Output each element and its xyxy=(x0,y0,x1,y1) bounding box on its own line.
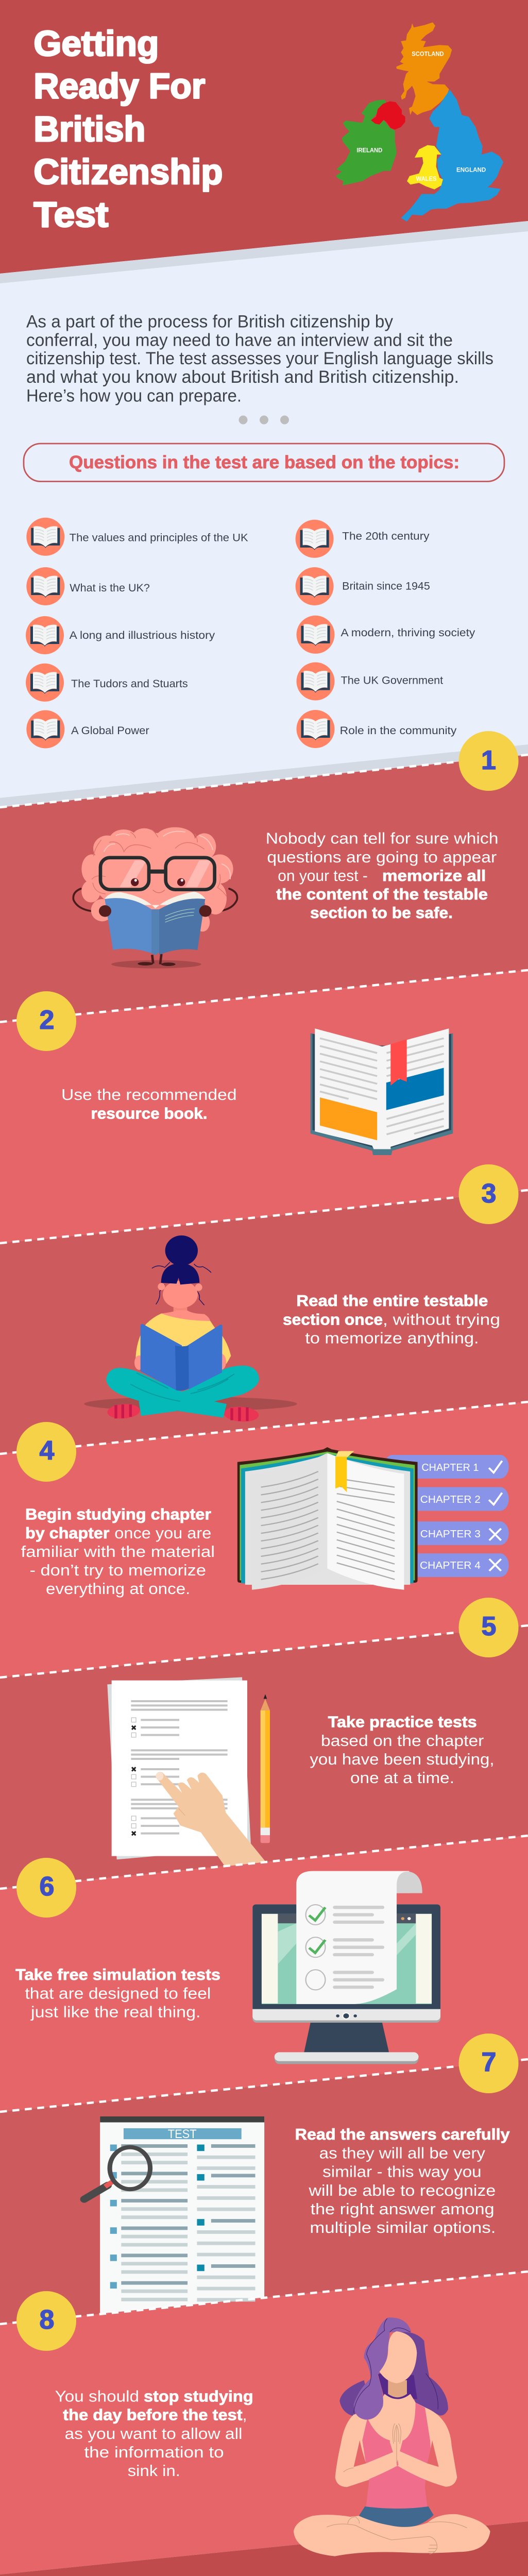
step 2 text: Use the recommended xyxy=(61,1086,237,1104)
step 3 text: section once xyxy=(283,1311,383,1328)
step 4 text xyxy=(21,1505,215,1598)
map of UK and Ireland xyxy=(336,22,503,222)
topic: since 1945 xyxy=(296,567,430,605)
step 4 text: - don’t try to memorize xyxy=(30,1561,206,1579)
topic list xyxy=(26,518,475,748)
step 1 text xyxy=(266,829,499,922)
title xyxy=(33,24,223,234)
step 8 text: , xyxy=(243,2406,247,2424)
intro text: and what you know about British and British citizenship. xyxy=(26,367,459,387)
step 6 text xyxy=(15,1965,220,2021)
step 1 panel xyxy=(73,827,498,969)
three dots xyxy=(239,415,289,425)
intro text: As a part of the process for British citizenship by xyxy=(26,312,393,331)
step 5 text: Take practice tests xyxy=(328,1713,477,1731)
number badge 6: 6 xyxy=(40,1872,54,1902)
number badge 3 xyxy=(458,1164,518,1224)
number badge 7: 7 xyxy=(482,2047,496,2077)
step 1 text: section to be safe. xyxy=(310,904,453,922)
topic: what is the UK: What is the UK? xyxy=(70,582,150,594)
step 7 text: will be able to recognize xyxy=(308,2181,496,2199)
dashed dividers xyxy=(0,755,528,2324)
illustration: monitor with checklist xyxy=(252,1871,440,2064)
number badge 4: 4 xyxy=(40,1436,55,1466)
step 5 text: you have been studying, xyxy=(310,1750,495,1768)
topic: Tudors xyxy=(26,664,188,702)
step 8 text: the information to xyxy=(84,2443,224,2461)
chapter tabs: CHAPTER 1 xyxy=(421,1462,479,1473)
step 3 text xyxy=(283,1292,500,1347)
title: Ready For xyxy=(33,66,205,106)
step 1 text: memorize all xyxy=(382,867,486,885)
topic: 20th century xyxy=(296,520,430,558)
step 5 text: based on the chapter xyxy=(321,1732,484,1750)
topic: Tudors: The Tudors and Stuarts xyxy=(71,678,188,690)
number badge 1 xyxy=(458,731,518,791)
illustration: brain reading xyxy=(73,827,237,969)
title: British xyxy=(33,109,145,149)
map of UK and Ireland: ENGLAND xyxy=(456,167,486,174)
topic: 20th century: The 20th century xyxy=(342,531,430,542)
topic: since 1945: Britain since 1945 xyxy=(342,580,430,592)
step 5 text xyxy=(310,1713,495,1787)
step 1 text: the content of the testable xyxy=(276,885,488,903)
step 4 panel xyxy=(21,1447,509,1598)
number badge 2: 2 xyxy=(40,1005,54,1035)
title: Citizenship xyxy=(33,152,223,192)
topic: history xyxy=(26,616,215,654)
step 8 text: as you want to allow all xyxy=(65,2425,242,2443)
step 2 text xyxy=(61,1086,237,1122)
topic: global power xyxy=(26,710,149,748)
chapter tabs: CHAPTER 3 xyxy=(420,1529,481,1540)
topic: modern society: A modern, thriving society xyxy=(341,627,475,639)
step 3 text: , without trying xyxy=(383,1311,500,1328)
step 7 text: Read the answers carefully xyxy=(295,2125,510,2143)
number badge 8: 8 xyxy=(40,2305,54,2335)
step 7 panel xyxy=(84,2116,510,2314)
topic: what is the UK xyxy=(26,567,150,605)
topic: modern society xyxy=(297,616,475,654)
illustration: test paper, hand and pencil xyxy=(107,1677,270,1867)
step 7 text: multiple similar options. xyxy=(310,2218,496,2236)
step 7 text: as they will all be very xyxy=(319,2144,486,2162)
number badge 3: 3 xyxy=(482,1179,496,1209)
intro text: conferral, you may need to have an interview and sit the xyxy=(26,331,453,350)
number badge 2 xyxy=(16,991,76,1051)
step 5 text: one at a time. xyxy=(350,1769,454,1787)
step 8 text: the day before the test xyxy=(63,2406,243,2424)
number badge 5 xyxy=(458,1598,518,1657)
topic: global power: A Global Power xyxy=(71,725,149,737)
step 2 panel xyxy=(61,1028,453,1155)
topic: community: Role in the community xyxy=(340,725,457,737)
map of UK and Ireland: WALES xyxy=(416,176,437,182)
topics heading box: Questions in the test are based on the topics: xyxy=(69,452,459,472)
step 8 panel xyxy=(55,2317,490,2556)
number badge 6 xyxy=(16,1858,76,1918)
topic: government xyxy=(297,663,443,701)
illustration: test sheet with magnifier xyxy=(84,2116,264,2314)
number badge 8 xyxy=(16,2291,76,2351)
chapter tabs xyxy=(384,1455,509,1577)
step 3 panel xyxy=(84,1235,500,1423)
topic: values: The values and principles of the UK xyxy=(70,532,248,544)
intro text: citizenship test. The test assesses your English language skills xyxy=(26,349,493,368)
illustration: woman reading xyxy=(84,1235,297,1423)
chapter tabs: CHAPTER 2 xyxy=(420,1494,481,1505)
step 8 text: sink in. xyxy=(128,2462,180,2480)
step 6 panel xyxy=(15,1871,440,2064)
topic: government: The UK Government xyxy=(341,675,443,687)
step 4 text: once you are xyxy=(114,1524,211,1542)
step 4 text: familiar with the material xyxy=(21,1543,215,1561)
intro text xyxy=(26,312,493,406)
topic: history: A long and illustrious history xyxy=(70,630,215,641)
illustration: open resource book xyxy=(311,1028,453,1155)
step 1 text: on your test - xyxy=(278,867,368,885)
topic: community xyxy=(297,710,457,748)
number badge 7 xyxy=(458,2033,518,2093)
step 6 text: that are designed to feel xyxy=(25,1985,211,2002)
step 6 text: just like the real thing. xyxy=(30,2003,201,2021)
title: Getting xyxy=(33,24,159,63)
step 5 panel xyxy=(107,1677,495,1867)
step 8 text: stop studying xyxy=(144,2387,253,2405)
step 8 text xyxy=(55,2387,253,2480)
chapter tabs: CHAPTER 4 xyxy=(420,1560,481,1571)
step 4 text: by chapter xyxy=(25,1524,109,1542)
step 1 text: questions are going to appear xyxy=(267,848,497,866)
step 8 text: You should xyxy=(55,2387,139,2405)
step 7 text: similar - this way you xyxy=(322,2163,482,2181)
illustration: meditating woman xyxy=(294,2317,490,2556)
step 2 text: resource book. xyxy=(91,1104,207,1122)
number badge 1: 1 xyxy=(481,745,496,775)
number badge 5: 5 xyxy=(482,1612,496,1641)
step 7 text xyxy=(295,2125,510,2236)
intro text: Here’s how you can prepare. xyxy=(26,386,242,406)
step 6 text: Take free simulation tests xyxy=(15,1965,220,1984)
step 1 text: Nobody can tell for sure which xyxy=(266,829,499,848)
title: Test xyxy=(33,195,108,234)
step 3 text: to memorize anything. xyxy=(305,1329,479,1347)
step 7 text: the right answer among xyxy=(311,2200,495,2218)
topics heading box xyxy=(24,444,504,481)
illustration: test sheet with magnifier: TEST xyxy=(168,2127,197,2141)
map of UK and Ireland: IRELAND xyxy=(356,147,382,154)
map of UK and Ireland: SCOTLAND xyxy=(412,51,444,57)
step 4 text: everything at once. xyxy=(46,1580,190,1598)
topic: values xyxy=(26,518,248,556)
number badge 4 xyxy=(16,1422,76,1482)
illustration: open book with bookmark xyxy=(237,1447,418,1590)
step 3 text: Read the entire testable xyxy=(296,1292,488,1310)
step 4 text: Begin studying chapter xyxy=(25,1505,211,1523)
